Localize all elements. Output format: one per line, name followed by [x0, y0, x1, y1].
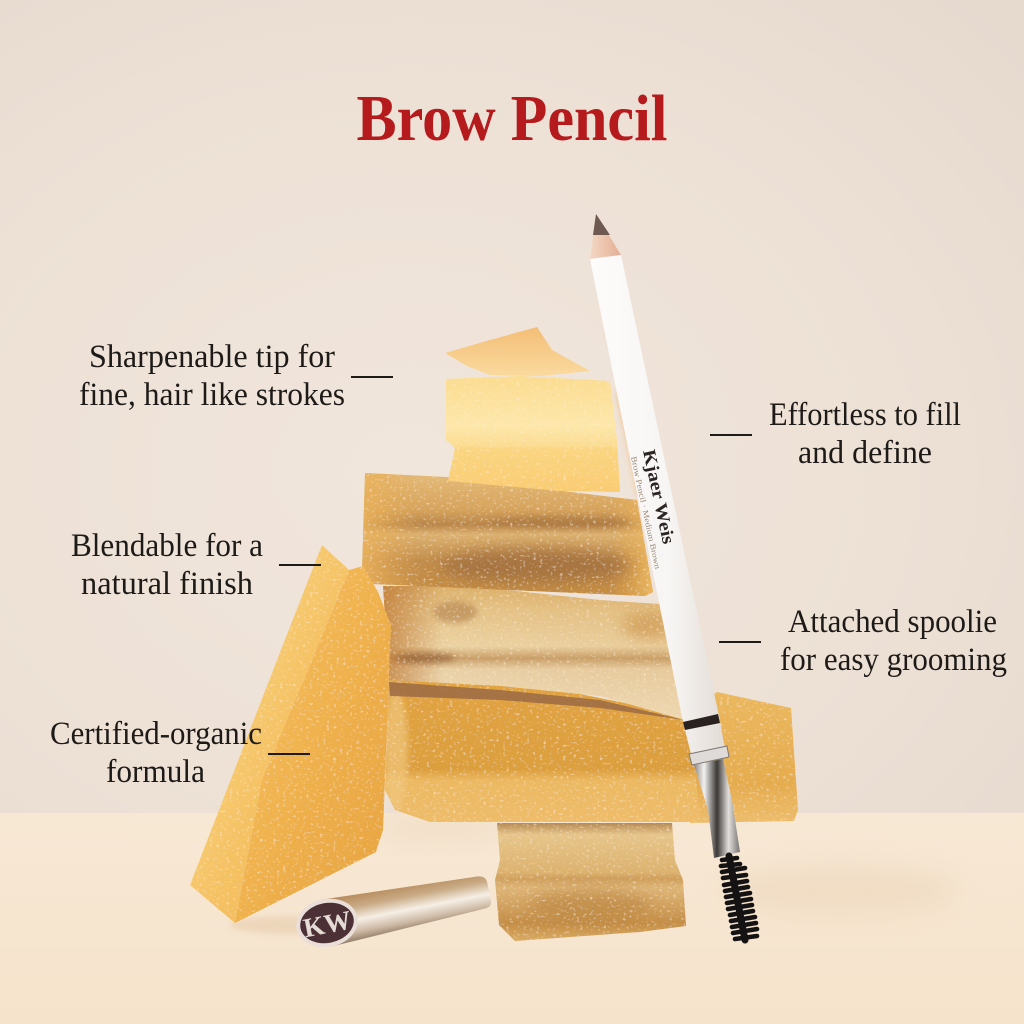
- table surface: [0, 813, 1024, 1024]
- callout text: Blendable for a: [71, 528, 263, 564]
- callout leader line: [279, 564, 321, 566]
- callout leader line: [719, 641, 761, 643]
- pencil black band: [683, 714, 720, 730]
- callout: attached spoolie: [719, 604, 1007, 678]
- callout text: formula: [106, 754, 205, 790]
- callout text: [780, 604, 1007, 678]
- callout text: for easy grooming: [780, 642, 1007, 678]
- callout text: Attached spoolie: [788, 604, 997, 640]
- callout: blendable: [71, 528, 321, 602]
- callout: certified organic: [50, 716, 310, 790]
- silver ferrule: [694, 759, 740, 858]
- callout text: [71, 528, 263, 602]
- background wall: [0, 0, 1024, 814]
- dark seam above amber bar: [389, 682, 684, 720]
- silver ring: [689, 746, 729, 765]
- pencil lead: [593, 214, 610, 235]
- block: brown bar: [362, 473, 653, 596]
- cap end with monogram: KW: [301, 905, 354, 943]
- floor shadows: [230, 816, 960, 934]
- callout text: natural finish: [81, 566, 253, 602]
- title: Brow Pencil: [356, 82, 668, 155]
- callout leader line: [710, 434, 752, 436]
- callout leader line: [351, 376, 393, 378]
- block: top yellow piece: [446, 376, 620, 492]
- pencil barrel: [590, 255, 726, 762]
- pencil reflection on wall: [616, 390, 646, 498]
- cap barrel: [322, 868, 494, 947]
- pencil logo text: Kjaer Weis: [639, 448, 679, 546]
- wax stack: [190, 327, 798, 941]
- callout text: [769, 397, 961, 471]
- block: leaning wedge: [190, 545, 391, 923]
- block: pale layered bar: [383, 586, 685, 720]
- block: large amber bar: [384, 676, 700, 822]
- callout: sharpenable tip: [79, 339, 393, 413]
- callout text: fine, hair like strokes: [79, 377, 345, 413]
- cap end with monogram: [292, 894, 362, 952]
- pencil wood tip: [590, 214, 621, 259]
- callout text: Effortless to fill: [769, 397, 961, 433]
- callout text: and define: [798, 435, 932, 471]
- wax flake: [445, 327, 590, 376]
- brow pencil: [590, 214, 757, 940]
- block: large amber bar right end: [690, 692, 798, 823]
- spoolie brush: [721, 856, 757, 940]
- pencil shade text: Brow Pencil · Medium Brown: [629, 456, 662, 570]
- callout: effortless: [710, 397, 961, 471]
- callout leader line: [268, 753, 310, 755]
- callout text: Sharpenable tip for: [89, 339, 335, 375]
- gold cap: [292, 868, 494, 952]
- callout text: [50, 716, 262, 790]
- callout text: Certified-organic: [50, 716, 262, 752]
- block: bottom fudge piece: [495, 823, 686, 941]
- callout text: [79, 339, 345, 413]
